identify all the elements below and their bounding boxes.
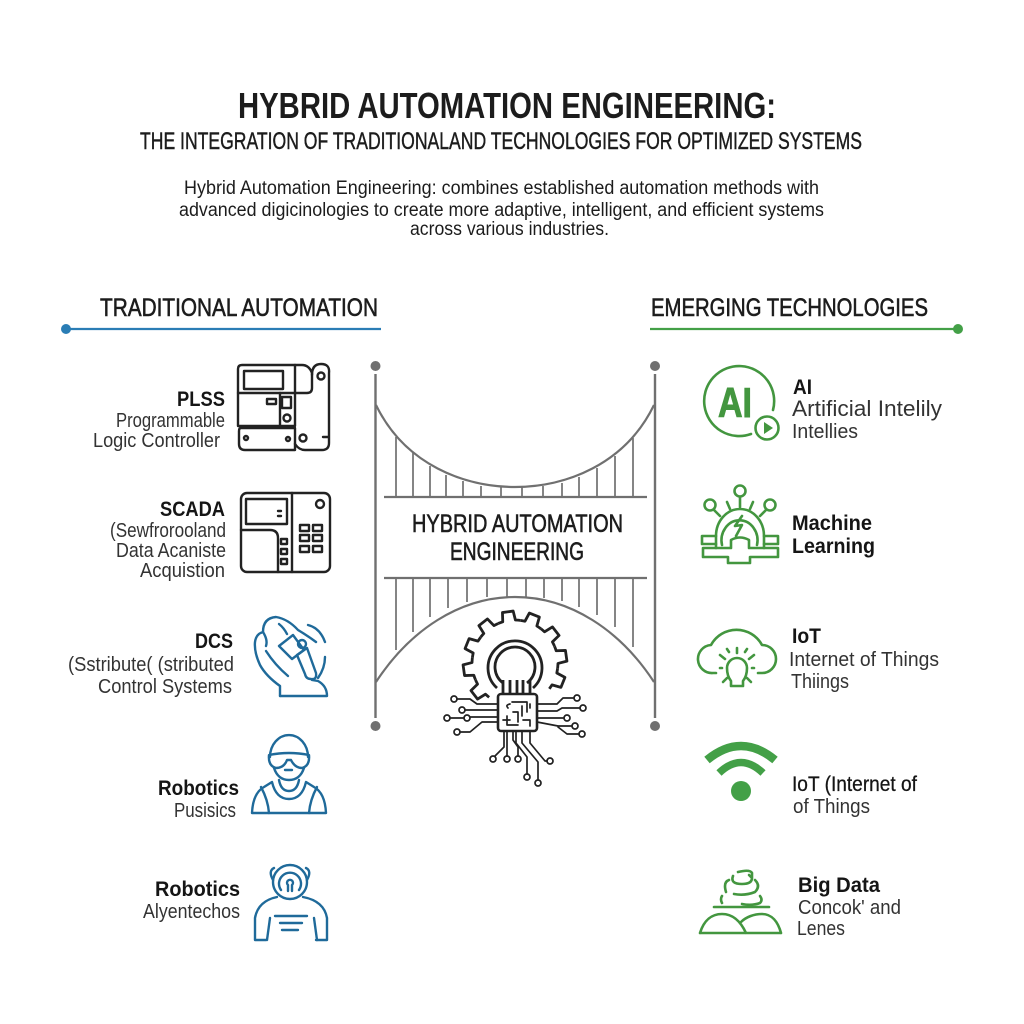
icon: PLC controller <box>238 364 329 450</box>
item: PLSS label: Programmable <box>116 410 225 432</box>
item: big data label: Big Data <box>798 874 880 897</box>
intro text: advanced digicinologies to create more adaptive, intelligent, and efficient systems <box>179 200 824 221</box>
item: SCADA label: SCADA <box>160 498 225 521</box>
title: HYBRID AUTOMATION ENGINEERING: <box>238 85 776 126</box>
heading: traditional automation <box>61 294 381 334</box>
item: AI label: AI <box>793 376 812 399</box>
item: SCADA label: Data Acaniste <box>116 540 226 562</box>
panel: emerging technologies items <box>698 366 942 940</box>
item: big data label: Concok' and <box>798 897 901 919</box>
item: DCS label: Control Systems <box>98 676 232 698</box>
heading: emerging technologies: EMERGING TECHNOLOGIES <box>651 294 928 322</box>
icon: machine learning <box>702 486 778 563</box>
bridge label <box>412 510 623 566</box>
item: Robotics label 1 <box>158 777 239 822</box>
item: Robotics label 1: Robotics <box>158 777 239 800</box>
item: DCS label: (Sstribute( (stributed <box>68 654 234 676</box>
item: IoT internet of things label <box>792 773 917 818</box>
icon: AI circle: AI <box>718 379 752 426</box>
item: SCADA label: (Sewfrorooland <box>110 520 226 542</box>
diagram: central bridge <box>370 361 660 786</box>
circuit traces <box>444 695 586 786</box>
bridge label: ENGINEERING <box>450 538 584 566</box>
item: IoT label: Thiings <box>791 671 849 693</box>
item: PLSS label: PLSS <box>177 388 225 411</box>
item: AI label: Artificial Intelily <box>792 396 942 421</box>
item: SCADA label: Acquistion <box>140 560 225 582</box>
item: Robotics label 2: Robotics <box>155 878 240 901</box>
icon: person with glasses <box>252 735 326 813</box>
icon: gear with circuit chip <box>444 610 586 786</box>
bridge cables and hangers <box>376 405 654 682</box>
icon: DCS hand <box>255 617 327 696</box>
intro text: across various industries. <box>410 219 609 240</box>
item: big data label: Lenes <box>797 918 845 940</box>
item: AI label <box>792 376 942 443</box>
item: Robotics label 1: Pusisics <box>174 800 236 822</box>
intro text <box>179 178 824 240</box>
item: AI label: Intellies <box>792 421 858 443</box>
item: Robotics label 2: Alyentechos <box>143 901 240 923</box>
chip <box>498 694 537 731</box>
icon: big data stack <box>700 871 781 933</box>
item: PLSS label: Logic Controller <box>93 430 220 452</box>
item: IoT internet of things label: of Things <box>793 796 870 818</box>
item: machine learning label <box>792 512 875 558</box>
item: IoT label: Internet of Things <box>789 649 939 671</box>
item: DCS label <box>68 630 234 698</box>
item: DCS label: DCS <box>195 630 233 653</box>
item: machine learning label: Learning <box>792 535 875 558</box>
heading: emerging technologies <box>650 294 963 334</box>
icon: wifi signal <box>707 746 775 801</box>
icon: AI circle <box>704 366 778 440</box>
item: big data label <box>797 874 901 940</box>
item: machine learning label: Machine <box>792 512 872 535</box>
item: Robotics label 2 <box>143 878 240 923</box>
bridge label: HYBRID AUTOMATION <box>412 510 623 538</box>
item: SCADA label <box>110 498 226 582</box>
item: IoT label <box>789 625 939 693</box>
bridge towers <box>370 361 660 731</box>
panel: traditional automation items <box>68 364 330 940</box>
heading: traditional automation: TRADITIONAL AUTOMATION <box>100 294 378 322</box>
item: PLSS label <box>93 388 225 452</box>
icon: cloud with bulb <box>698 630 776 686</box>
icon: person with sensor head <box>255 865 327 940</box>
icon: SCADA terminal <box>241 493 330 572</box>
item: IoT label: IoT <box>792 625 821 648</box>
intro text: Hybrid Automation Engineering: combines established automation methods with <box>184 178 819 199</box>
gear <box>462 610 568 704</box>
item: IoT internet of things label: IoT (Internet of <box>792 773 917 796</box>
